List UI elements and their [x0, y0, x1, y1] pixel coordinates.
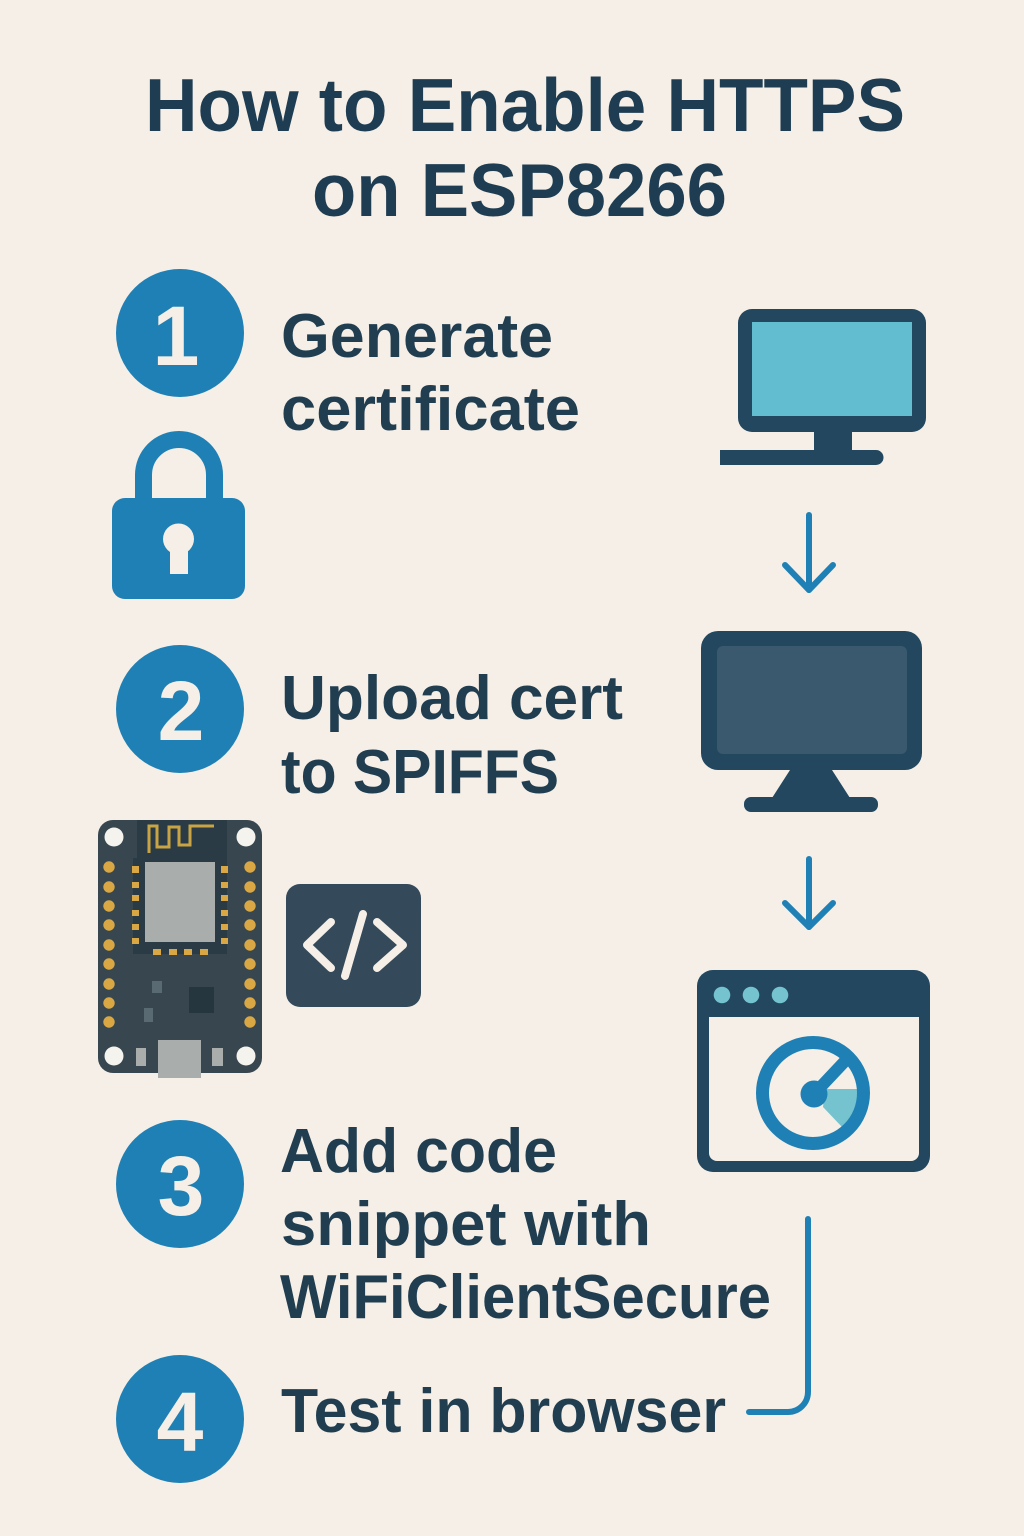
step 2 label: to SPIFFS — [281, 738, 559, 807]
icon: desktop monitor — [701, 631, 922, 812]
step 3 label: Add code — [280, 1117, 557, 1186]
title: How to Enable HTTPS — [145, 63, 905, 147]
step 1 label: certificate — [281, 375, 580, 444]
step 4 label: Test in browser — [281, 1377, 726, 1446]
step 2 label: Upload cert — [281, 664, 623, 733]
step 1 number badge: 1 — [153, 289, 199, 383]
step 1 number badge — [116, 269, 244, 397]
step 1 label: Generate — [281, 302, 553, 371]
step 2 label — [281, 664, 623, 807]
arrow: monitor to browser — [785, 859, 833, 927]
module solder pads — [132, 866, 228, 955]
step 3 label: WiFiClientSecure — [280, 1263, 771, 1332]
icon: padlock — [112, 440, 245, 599]
gauge — [823, 1089, 858, 1127]
step 3 number badge — [116, 1120, 244, 1248]
title — [145, 63, 905, 232]
icon: code tag — [286, 884, 421, 1007]
arrow: browser connector to step 4 — [749, 1219, 808, 1412]
metal shield — [145, 862, 215, 942]
icon: laptop — [720, 309, 926, 465]
mounting holes — [104, 828, 256, 1066]
step 3 label — [280, 1117, 771, 1332]
gold header pins — [103, 861, 256, 1028]
USB connector and side components — [158, 1040, 201, 1078]
small chips — [189, 987, 214, 1013]
step 2 number badge — [116, 645, 244, 773]
step 4 number badge — [116, 1355, 244, 1483]
step 1 label — [281, 302, 580, 444]
icon: ESP8266 board — [98, 820, 262, 1078]
step 2 number badge: 2 — [158, 664, 204, 758]
arrow: laptop to monitor — [785, 515, 833, 590]
antenna trace — [149, 826, 214, 853]
icon: browser window with gauge — [697, 970, 930, 1172]
step 3 label: snippet with — [281, 1190, 651, 1259]
title: on ESP8266 — [312, 148, 727, 232]
step 3 number badge: 3 — [158, 1139, 204, 1233]
step 4 number badge: 4 — [157, 1375, 204, 1469]
